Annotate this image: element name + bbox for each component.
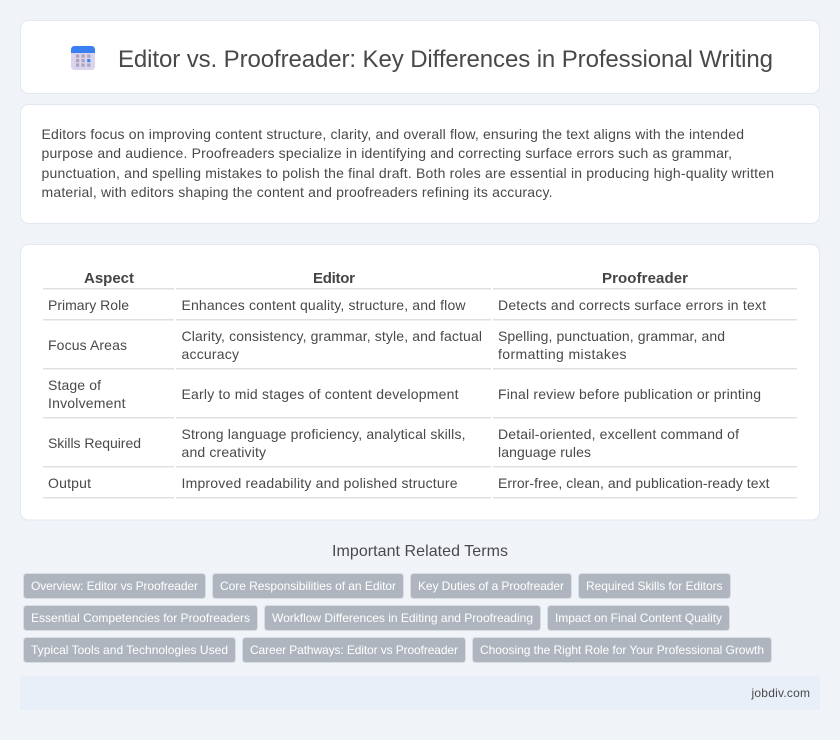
tag: Essential Competencies for Proofreaders (31, 611, 250, 625)
table row: focus areas: Clarity, consistency, grammar, style, and factual (182, 328, 482, 344)
table row: stage of involvement: Involvement (48, 395, 126, 411)
table row: skills required: Strong language proficiency, analytical skills, (182, 426, 466, 442)
table row: stage of involvement (48, 377, 761, 411)
table row: output: Output (48, 475, 91, 491)
tag (24, 606, 258, 630)
tag: Impact on Final Content Quality (555, 611, 722, 625)
tag: Required Skills for Editors (586, 579, 722, 593)
table row: skills required: and creativity (182, 444, 266, 460)
table header row: Editor (313, 270, 355, 287)
tag (264, 606, 540, 630)
table row: stage of involvement: Stage of (48, 377, 101, 393)
table row: stage of involvement: Final review before publication or printing (498, 386, 761, 402)
tag: Key Duties of a Proofreader (418, 579, 564, 593)
text block: introduction paragraph: purpose and audience. Proofreaders specialize in identifying and correcting surface errors such as grammar, (42, 145, 732, 161)
tag: Core Responsibilities of an Editor (220, 579, 396, 593)
table row: output: Error-free, clean, and publication-ready text (498, 475, 770, 491)
table row: primary role (48, 297, 766, 313)
table row: primary role: Detects and corrects surface errors in text (498, 297, 766, 313)
table header row: Proofreader (602, 270, 688, 287)
tag: Overview: Editor vs Proofreader (31, 579, 198, 593)
table row: stage of involvement: Early to mid stages of content development (182, 386, 459, 402)
tag: Workflow Differences in Editing and Proofreading (272, 611, 533, 625)
table row: primary role: Primary Role (48, 297, 129, 313)
table header row (84, 270, 688, 287)
table row: focus areas: formatting mistakes (498, 346, 626, 362)
title: Editor vs. Proofreader: Key Differences in Professional Writing (118, 46, 773, 73)
footer: jobdiv.com (750, 686, 810, 700)
tag (24, 638, 236, 662)
panel: comparison table (20, 244, 820, 520)
tag (242, 638, 466, 662)
tag: Choosing the Right Role for Your Professional Growth (480, 643, 764, 657)
table row: focus areas: Spelling, punctuation, grammar, and (498, 328, 725, 344)
table row: primary role: Enhances content quality, structure, and flow (182, 297, 466, 313)
panel: introduction (20, 104, 820, 224)
text block: introduction paragraph (42, 126, 774, 200)
table row: output (48, 475, 770, 491)
tag (212, 574, 404, 598)
tag (578, 574, 730, 598)
table row: focus areas: accuracy (182, 346, 239, 362)
table row: skills required: language rules (498, 444, 591, 460)
text block: introduction paragraph: punctuation, and spelling mistakes to polish the final draft. Both roles are essential in producing high-quality written (42, 165, 774, 181)
tag: Career Pathways: Editor vs Proofreader (250, 643, 458, 657)
tag (410, 574, 572, 598)
tag (548, 606, 730, 630)
table row: skills required: Detail-oriented, excellent command of (498, 426, 739, 442)
table row: skills required (48, 426, 739, 460)
footer (20, 676, 820, 710)
text block: introduction paragraph: Editors focus on improving content structure, clarity, and overall flow, ensuring the text aligns with the intended (42, 126, 744, 142)
table header row: Aspect (84, 270, 134, 287)
panel: header (20, 20, 820, 94)
table row: focus areas (48, 328, 725, 362)
heading: important related terms: Important Related Terms (332, 543, 508, 560)
table row: output: Improved readability and polished structure (182, 475, 458, 491)
tag: Typical Tools and Technologies Used (31, 643, 228, 657)
tag (472, 638, 772, 662)
text block: introduction paragraph: material, with editors shaping the content and proofreaders refining its accuracy. (42, 184, 552, 200)
related term tags (24, 574, 772, 662)
icon: calendar (71, 46, 95, 70)
tag (24, 574, 206, 598)
table row: focus areas: Focus Areas (48, 337, 127, 353)
table row: skills required: Skills Required (48, 435, 141, 451)
